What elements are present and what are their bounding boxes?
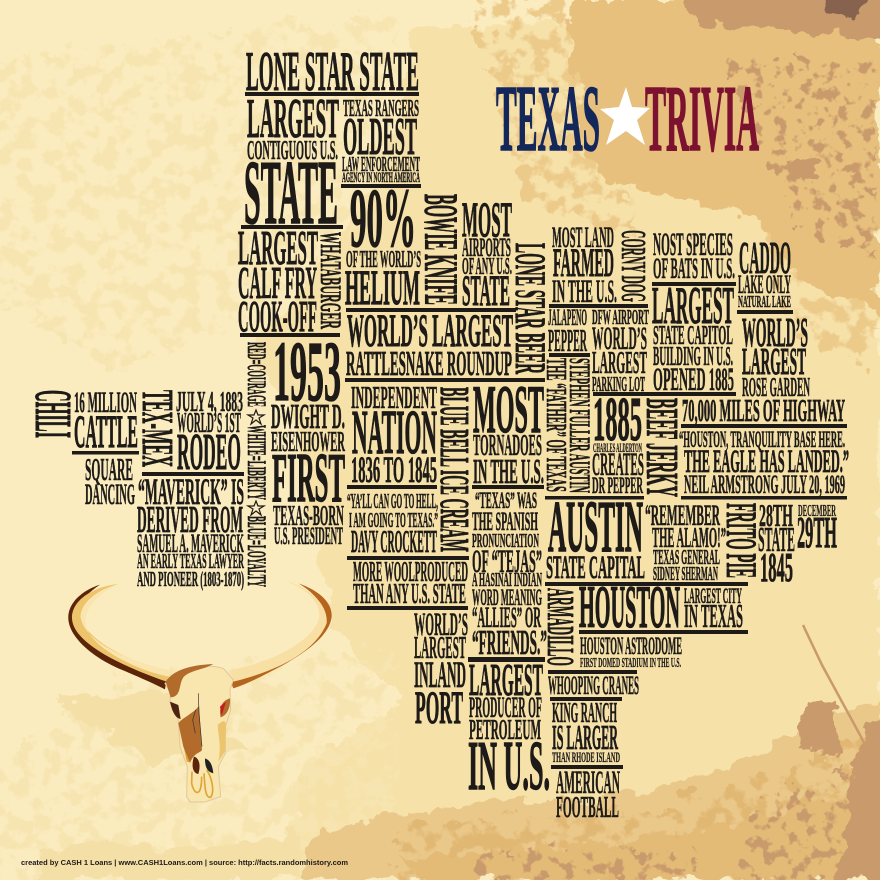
panel: east texas facts: NATURAL LAKE bbox=[738, 292, 791, 311]
text: OF “TEJAS” bbox=[472, 544, 542, 580]
panel: east texas facts: IN THE U.S. bbox=[552, 274, 617, 310]
text: WORLD’S LARGEST bbox=[347, 305, 513, 357]
text: LAW ENFORCEMENT bbox=[342, 152, 420, 176]
panel: west texas facts: CATTLE bbox=[74, 406, 138, 458]
panel: capital and south texas facts: IN TEXAS bbox=[684, 598, 743, 635]
text: “ALLIES” OR bbox=[472, 601, 541, 634]
panel: capital and south texas facts: “REMEMBER bbox=[645, 499, 720, 532]
text: PRONUNCIATION bbox=[472, 530, 539, 552]
panel: west texas facts: JULY 4, 1883 bbox=[176, 386, 243, 418]
panel: capital and south texas facts: TEXAS GENERAL bbox=[653, 545, 720, 569]
panel: central texas facts: INDEPENDENT bbox=[351, 379, 437, 415]
text: THE “FATHER” OF TEXAS bbox=[540, 358, 572, 492]
panel: north central facts: HELIUM bbox=[345, 259, 420, 315]
panel: east texas facts: STATE CAPITOL bbox=[653, 320, 733, 350]
text: BEEF JERKY bbox=[637, 398, 687, 497]
panel: panhandle facts: LARGEST bbox=[238, 220, 318, 275]
panel: capital and south texas facts: ARMADILLO bbox=[539, 588, 581, 666]
panel: capital and south texas facts: WHOOPING CRANES bbox=[548, 671, 639, 700]
panel: east texas facts bbox=[540, 221, 849, 499]
text: DWIGHT D. bbox=[271, 397, 345, 436]
panel: west texas facts: “MAVERICK” IS bbox=[138, 472, 244, 513]
panel: panhandle facts bbox=[238, 41, 420, 341]
panel: capital and south texas facts: HOUSTON bbox=[579, 574, 680, 640]
panel: panhandle facts: STATE bbox=[244, 142, 338, 243]
panel: central texas facts: 1836 TO 1845 bbox=[351, 450, 437, 491]
panel: west texas facts: TEX-MEX bbox=[133, 390, 182, 467]
panel: capital and south texas facts: KING RANCH bbox=[552, 698, 617, 729]
text: PRODUCER OF bbox=[469, 691, 542, 724]
panel: north central facts: STATE bbox=[462, 268, 510, 315]
text: TEXAS RANGERS bbox=[343, 96, 419, 122]
panel: panhandle facts: CONTIGUOUS U.S. bbox=[247, 135, 338, 165]
text: A HASINAI INDIAN bbox=[472, 569, 542, 591]
panel: central texas facts: WORLD’S bbox=[414, 607, 468, 643]
panel: west texas facts: SQUARE bbox=[85, 451, 133, 487]
panel: capital and south texas facts: STATE CAPITAL bbox=[546, 550, 645, 586]
panel: capital and south texas facts: THAN RHODE ISLAND bbox=[552, 750, 620, 766]
text: BLUE=LOYALTY bbox=[242, 516, 271, 587]
vertical label: flag colours: RED=COURAGE bbox=[242, 342, 271, 407]
panel: east texas facts: PARKING LOT bbox=[592, 372, 645, 396]
divider rules bbox=[72, 92, 847, 769]
panel: central texas facts: NATION bbox=[352, 399, 437, 467]
text: U.S. PRESIDENT bbox=[274, 523, 343, 550]
text: STEPHEN FULLER AUSTIN bbox=[563, 358, 596, 493]
text: RATTLESNAKE ROUNDUP bbox=[346, 344, 512, 383]
panel: east texas facts: OPENED 1885 bbox=[653, 362, 734, 398]
panel: north central facts: AIRPORTS bbox=[462, 233, 511, 262]
panel: capital and south texas facts: FRITO PIE bbox=[717, 503, 764, 578]
panel: west texas facts: CHILI bbox=[24, 390, 81, 438]
text: MOST bbox=[473, 371, 544, 447]
panel: panhandle facts: CALF FRY bbox=[238, 257, 317, 308]
text: TORNADOES bbox=[473, 427, 542, 462]
panel: east texas facts: DR PEPPER bbox=[592, 473, 643, 498]
panel: east texas facts: WORLD’S bbox=[592, 321, 647, 357]
icon: longhorn skull bbox=[68, 580, 332, 802]
text: 1953 bbox=[273, 323, 341, 419]
panel: west texas facts: WORLD’S 1ST bbox=[177, 407, 241, 439]
panel: central texas facts: THAN ANY U.S. STATE bbox=[353, 579, 466, 610]
text: “TEXAS” WAS bbox=[475, 488, 537, 513]
panel: central texas facts: I AM GOING TO TEXAS.” bbox=[349, 508, 438, 532]
text: LARGEST bbox=[469, 654, 543, 705]
text: OLDEST bbox=[343, 108, 417, 166]
title: TEXAS bbox=[496, 67, 600, 171]
panel: east texas facts: OF BATS IN U.S. bbox=[653, 252, 735, 285]
panel: east texas facts: BUILDING IN U.S. bbox=[653, 341, 733, 371]
title star bbox=[600, 87, 650, 145]
panel: central texas facts: “YA’LL CAN GO TO HELL, bbox=[347, 489, 438, 513]
panel: west texas facts: SAMUEL A. MAVERICK bbox=[137, 529, 244, 558]
text: EISENHOWER bbox=[271, 426, 345, 458]
text: “FRIENDS.” bbox=[472, 623, 547, 662]
panel: east texas facts: FARMED bbox=[553, 240, 614, 285]
text: PETROLEUM bbox=[469, 714, 541, 746]
panel: panhandle facts: COOK-OFF bbox=[238, 292, 317, 341]
panel: west texas facts: DANCING bbox=[85, 478, 135, 511]
panel: east texas facts: CREATES bbox=[592, 447, 644, 483]
text: LONE STAR STATE bbox=[246, 41, 419, 103]
panel: west texas facts: 16 MILLION bbox=[74, 386, 137, 419]
panel: capital and south texas facts: AMERICAN bbox=[556, 765, 620, 801]
text: THE SPANISH bbox=[472, 507, 538, 536]
panel: capital and south texas facts: 28TH bbox=[759, 497, 793, 533]
panel: east texas facts: LARGEST bbox=[592, 344, 647, 380]
text: AGENCY IN NORTH AMERICA bbox=[342, 170, 420, 186]
panel: west texas facts: AN EARLY TEXAS LAWYER bbox=[137, 549, 244, 573]
panel: west texas facts: DERIVED FROM bbox=[137, 499, 243, 541]
panel: north central facts: 90% bbox=[350, 172, 416, 265]
panel: east texas facts: DFW AIRPORT bbox=[592, 305, 649, 329]
panel: capital and south texas facts: FOOTBALL bbox=[556, 789, 619, 824]
panel: capital and south texas facts: 1845 bbox=[760, 544, 793, 590]
text: IN U.S. bbox=[468, 728, 550, 805]
text: FIRST bbox=[272, 440, 345, 517]
panel: east texas facts: 1885 bbox=[593, 386, 642, 454]
panel: east texas facts: JALAPENO bbox=[548, 305, 587, 330]
panel: central texas facts bbox=[347, 371, 550, 805]
panel: capital and south texas facts: HOUSTON ASTRODOME bbox=[580, 633, 682, 660]
panel: east texas facts: PEPPER bbox=[548, 322, 587, 358]
panel: east texas facts: CHARLES ALDERTON bbox=[593, 440, 642, 455]
panel: capital and south texas facts: STATE bbox=[758, 520, 795, 559]
panel: capital and south texas facts bbox=[539, 486, 837, 824]
panel: north central facts: OF THE WORLD’S bbox=[346, 247, 421, 273]
panel: panhandle facts: LARGEST bbox=[247, 88, 339, 150]
panel: north central facts: MOST bbox=[462, 191, 512, 247]
panel: capital and south texas facts: SIDNEY SHERMAN bbox=[653, 563, 718, 585]
text: TEXAS-BORN bbox=[273, 500, 344, 532]
panel: central texas facts: DAVY CROCKETT bbox=[351, 523, 437, 559]
panel: capital and south texas facts: IS LARGER bbox=[552, 718, 618, 757]
panel: west texas facts: AND PIONEER (1803-1870) bbox=[137, 567, 244, 591]
panel: central texas facts: INLAND bbox=[414, 655, 466, 696]
panel: west texas facts bbox=[24, 323, 345, 591]
panel: west texas facts: RODEO bbox=[177, 424, 241, 481]
panel: east texas facts: CORNY DOG bbox=[614, 230, 653, 302]
panel: capital and south texas facts: LARGEST CITY bbox=[684, 583, 742, 608]
panel: north central facts: OF ANY U.S. bbox=[462, 254, 512, 280]
panel: north central facts: BOWIE KNIFE bbox=[414, 194, 467, 305]
text: WORD MEANING bbox=[472, 585, 542, 610]
panel: central texas facts: MORE WOOLPRODUCED bbox=[353, 557, 468, 588]
panel: capital and south texas facts: THE ALAMO!” bbox=[652, 522, 726, 554]
panel: central texas facts: BLUE BELL ICE CREAM bbox=[432, 387, 478, 552]
panel: central texas facts: LARGEST bbox=[414, 629, 466, 665]
panel: capital and south texas facts: AUSTIN bbox=[548, 486, 643, 567]
text: IN THE U.S. bbox=[473, 452, 544, 491]
panel: north central facts bbox=[345, 172, 553, 383]
panel: capital and south texas facts: FIRST DOMED STADIUM IN THE U.S. bbox=[580, 656, 681, 671]
text: LONE STAR BEER bbox=[506, 243, 553, 374]
panel: central texas facts: PORT bbox=[415, 682, 463, 734]
vertical label: flag colours: WHITE=LIBERTY bbox=[242, 425, 271, 500]
text: WHATABURGER bbox=[314, 232, 347, 329]
panel: east texas facts: MOST LAND bbox=[552, 221, 614, 254]
footer credit: created by CASH 1 Loans | www.CASH1Loans.com | source: http://facts.randomhistory.com bbox=[21, 858, 349, 867]
